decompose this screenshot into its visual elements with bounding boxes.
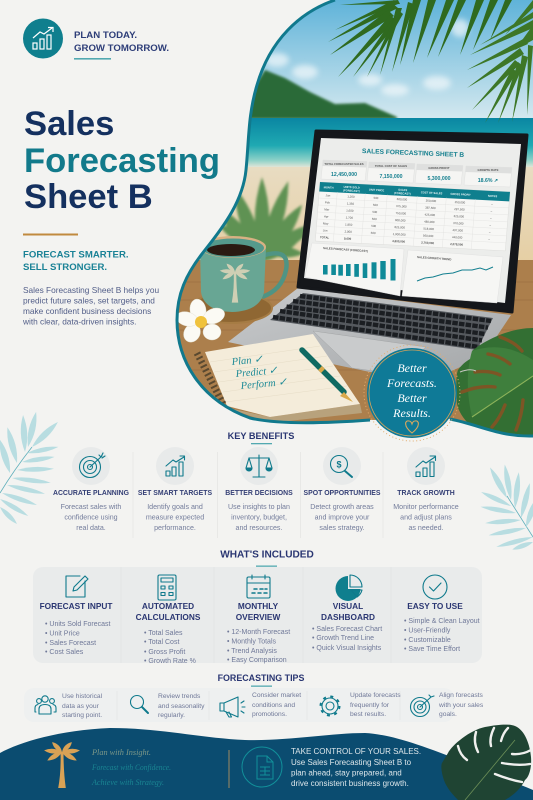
script slogan: Achieve with Strategy. [91, 777, 164, 787]
sales table: – [490, 216, 492, 220]
handwritten list: Predict ✓ [234, 365, 278, 380]
sales table: 675,000 [396, 204, 407, 209]
tip: review trends: and seasonality [158, 703, 205, 710]
icon: gold palm [44, 741, 80, 788]
benefit: track growth: Monitor performance [393, 503, 459, 511]
item: visual dashboard: VISUAL [333, 601, 363, 611]
KPI cards: 5,300,000 [427, 176, 451, 182]
benefit: spot opportunities: SPOT OPPORTUNITIES [304, 490, 381, 497]
sales table: 2,750,000 [421, 240, 435, 245]
tagline: GROW TOMORROW. [74, 43, 169, 54]
tip: update forecasts: best results. [350, 711, 386, 718]
palm on mug [220, 262, 250, 303]
heading: what's included: WHAT'S INCLUDED [220, 550, 314, 560]
heading: key benefits: KEY BENEFITS [228, 431, 294, 441]
item: easy to use: • User-Friendly [404, 628, 451, 634]
call to action: TAKE CONTROL OF YOUR SALES. [291, 747, 421, 756]
laptop screen [298, 131, 527, 312]
item: visual dashboard: • Sales Forecast Chart [312, 626, 382, 633]
item: automated calculations: • Total Sales [144, 630, 183, 637]
sales table: – [491, 202, 493, 206]
sales table: 500 [371, 231, 376, 235]
KPI cards: 12,450,000 [331, 172, 357, 178]
KPI cards: GROWTH RATE [478, 168, 499, 172]
sales table: 370,000 [453, 221, 464, 226]
badge text: Better [397, 361, 427, 375]
section: forecasting tips [24, 673, 484, 722]
sales table: 407,000 [452, 228, 463, 233]
benefit: better decisions [225, 447, 293, 532]
sales table: 518,000 [423, 227, 434, 231]
sales table: 1,350 [347, 201, 355, 206]
sales table: 750,000 [395, 211, 407, 216]
item: visual dashboard: • Quick Visual Insights [312, 645, 382, 652]
sales table: 9,600 [344, 236, 352, 241]
sales table: NOTES [488, 194, 498, 198]
benefit: accurate planning: ACCURATE PLANNING [53, 490, 129, 497]
sales table: 1,850 [345, 222, 353, 227]
sales table: (FORECAST) [343, 188, 360, 193]
item: monthly overview: OVERVIEW [236, 612, 280, 622]
monstera leaf [456, 328, 533, 436]
KPI cards: TOTAL COST OF SALES [375, 164, 407, 168]
benefit: track growth: TRACK GROWTH [397, 490, 455, 497]
benefit: accurate planning: confidence using [64, 514, 118, 522]
tip: historical data: data as your [62, 703, 100, 710]
script slogan: Plan with Insight. [91, 747, 151, 757]
item: visual dashboard: • Growth Trend Line [312, 635, 374, 642]
coaster [200, 298, 273, 322]
benefit: spot opportunities: $ [336, 460, 342, 470]
sales table: UNITS SOLD [343, 185, 360, 190]
benefit: set smart targets: SET SMART TARGETS [138, 490, 212, 497]
sales table: – [488, 237, 491, 241]
item: automated calculations: • Total Cost [144, 639, 179, 646]
item: monthly overview: MONTHLY [238, 601, 279, 611]
item: forecast input [40, 576, 112, 656]
benefit: better decisions: BETTER DECISIONS [225, 490, 293, 497]
subtitle: FORECAST SMARTER. [23, 250, 129, 260]
tip: review trends [130, 693, 205, 719]
item: visual dashboard: DASHBOARD [321, 612, 375, 622]
benefit: set smart targets: Identify goals and [147, 503, 203, 511]
tip: update forecasts: Update forecasts [350, 692, 401, 699]
sales table: 287,500 [454, 207, 465, 212]
trackpad [313, 331, 426, 374]
growth line chart panel [402, 250, 503, 303]
heading: forecasting tips: FORECASTING TIPS [218, 673, 304, 683]
sales table: MONTH [324, 185, 334, 190]
sales table: Apr [324, 214, 329, 219]
handwritten list: Perform ✓ [239, 377, 288, 392]
item: forecast input: • Cost Sales [45, 649, 84, 656]
benefit: track growth: and adjust plans [400, 514, 452, 522]
item: automated calculations: AUTOMATED [142, 601, 194, 611]
heading: what's included [220, 550, 314, 567]
item: easy to use: • Save Time Effort [404, 646, 460, 653]
KPI cards: TOTAL FORECASTED SALES [324, 162, 364, 166]
item: monthly overview [227, 575, 290, 664]
sales table: 250,000 [455, 200, 466, 205]
decorative leaf right [480, 464, 533, 552]
benefit: spot opportunities: and improve your [315, 514, 370, 522]
icon: document [242, 747, 282, 787]
decorative leaf left [0, 411, 60, 526]
badge text: Better [397, 391, 427, 405]
sales table: 480,000 [424, 220, 435, 224]
footer monstera leaf [441, 725, 531, 800]
tip: update forecasts [320, 692, 401, 718]
sales table: 350,000 [426, 199, 437, 203]
sales table: GROSS PROFIT [450, 192, 471, 197]
sky [240, 0, 533, 118]
benefit: better decisions: inventory, budget, [231, 514, 287, 522]
sales table: 800,000 [395, 218, 406, 223]
bar chart panel [305, 243, 404, 296]
sales table: 560,000 [423, 234, 434, 238]
item: easy to use: EASY TO USE [407, 601, 463, 611]
tip: align with goals: with your sales [438, 702, 484, 709]
sales table: 500 [372, 217, 377, 221]
sales table: (FORECAST) [394, 191, 411, 196]
hero scene [170, 0, 533, 436]
sales table: 4,800,000 [392, 239, 406, 244]
badge text: Forecasts. [386, 376, 437, 390]
title: Forecasting [24, 142, 220, 180]
wooden table [170, 260, 533, 430]
intro text: with clear, data-driven insights. [22, 316, 136, 326]
sales table: SALES [398, 188, 408, 192]
sales table: Jun [323, 228, 328, 233]
tip: align with goals [410, 692, 484, 718]
title: Sheet B [24, 178, 153, 216]
tip: market conditions [220, 692, 301, 718]
sales table: Jan [325, 193, 331, 198]
item: easy to use: • Simple & Clean Layout [404, 618, 480, 625]
intro text: Sales Forecasting Sheet B helps you [23, 285, 159, 295]
pen [302, 350, 353, 402]
growth line chart panel: SALES GROWTH TREND [417, 255, 452, 261]
benefit: accurate planning: real data. [76, 524, 106, 532]
call to action: Use Sales Forecasting Sheet B to [291, 758, 412, 767]
benefit: better decisions: and resources. [236, 524, 282, 532]
item: automated calculations: CALCULATIONS [136, 612, 201, 622]
sales table: 825,000 [394, 225, 405, 230]
item: forecast input: • Unit Price [45, 630, 80, 638]
tagline: PLAN TODAY. [74, 30, 137, 41]
sales table: 500 [371, 224, 377, 228]
sales table: 500 [372, 210, 378, 214]
benefit: spot opportunities: Detect growth areas [310, 503, 374, 511]
icon: heart [406, 421, 418, 433]
title: Sales [24, 105, 114, 143]
tip: review trends: Review trends [158, 693, 201, 700]
coffee mug [200, 236, 287, 312]
sand [180, 167, 533, 262]
badge: better forecasts [364, 345, 460, 441]
sales table: Feb [325, 200, 330, 205]
benefit: spot opportunities [304, 447, 381, 532]
screen title: SALES FORECASTING SHEET B [362, 148, 464, 159]
sales table: 1,600 [346, 208, 354, 213]
sales table: 600,000 [397, 197, 408, 202]
plumeria flower [178, 298, 225, 342]
subtitle: SELL STRONGER. [23, 262, 107, 273]
sales table: – [489, 230, 491, 234]
tip: historical data [35, 693, 103, 719]
footer band [0, 725, 533, 800]
notebook [197, 334, 362, 423]
script slogan [91, 747, 171, 787]
laptop base [228, 288, 511, 376]
sales table: 500 [373, 196, 379, 200]
item: forecast input: • Units Sold Forecast [45, 621, 111, 628]
sales table [315, 182, 510, 251]
benefit: set smart targets: measure expected [146, 514, 204, 522]
tip: update forecasts: frequently for [350, 702, 390, 709]
sales table: May [323, 221, 329, 226]
sales table: 2,079,500 [450, 242, 464, 247]
script slogan: Forecast with Confidence. [91, 762, 171, 772]
sales table: 2,000 [344, 229, 352, 234]
benefit: set smart targets [138, 447, 212, 532]
intro text: predict future sales, set targets, and [23, 296, 155, 306]
icon: growth chart logo [23, 18, 63, 58]
handwritten list [232, 356, 286, 390]
item: monthly overview: • Trend Analysis [227, 648, 277, 655]
sales table: 440,000 [452, 235, 463, 240]
item: forecast input: • Sales Forecast [45, 640, 96, 647]
benefit: spot opportunities: sales strategy. [319, 524, 365, 532]
bar chart panel: SALES FORECAST (FORECAST) [323, 246, 368, 253]
hero outline [177, 0, 533, 436]
benefit: accurate planning [53, 447, 129, 532]
KPI cards: 7,150,000 [379, 174, 403, 180]
benefit: track growth [393, 447, 459, 532]
tip: market conditions: Consider market [252, 692, 301, 699]
sales table: 1,000,000 [393, 232, 406, 237]
badge text: Results. [392, 406, 431, 420]
handwritten list: Plan ✓ [230, 354, 264, 368]
tip: align with goals: goals. [439, 711, 457, 718]
tip: review trends: regularly. [158, 712, 185, 719]
item: easy to use [404, 575, 480, 653]
sales table: 425,000 [424, 213, 436, 217]
section: what's included [33, 550, 482, 665]
item: automated calculations: • Gross Profit [144, 649, 185, 656]
benefit: track growth: as needed. [408, 524, 444, 532]
island hill [245, 70, 397, 119]
item: automated calculations: • Growth Rate % [144, 658, 196, 665]
sales table: – [490, 209, 493, 213]
tip: historical data: starting point. [62, 712, 102, 719]
item: easy to use: • Customizable [404, 637, 451, 644]
sales table: 1,200 [347, 194, 355, 199]
sales table: – [489, 223, 492, 227]
call to action: drive consistent business growth. [291, 779, 409, 788]
logo and tagline [23, 18, 169, 60]
tip: market conditions: conditions and [252, 702, 295, 709]
intro text: make confident business decisions [23, 306, 151, 316]
spiral binding [197, 353, 224, 406]
sales table: UNIT PRICE [369, 188, 385, 192]
tip: market conditions: promotions. [252, 711, 287, 718]
benefit: set smart targets: performance. [154, 524, 196, 532]
tip: align with goals: Align forecasts [439, 692, 484, 699]
sales table: 1,700 [346, 215, 353, 220]
item: forecast input: FORECAST INPUT [40, 601, 112, 611]
call to action: plan ahead, stay prepared, and [291, 768, 402, 778]
sales table: Mar [324, 207, 330, 212]
sales table: COST OF SALES [421, 190, 443, 195]
sales table: TOTAL [320, 235, 330, 240]
item: visual dashboard [312, 575, 382, 652]
sales table: 500 [373, 203, 378, 207]
item: monthly overview: • Monthly Totals [227, 638, 277, 646]
section: key benefits [53, 431, 459, 538]
gold rule [23, 234, 78, 236]
sales table: 325,000 [453, 214, 465, 219]
KPI cards [321, 160, 512, 187]
item: monthly overview: • Easy Comparison [227, 657, 287, 664]
beach plant [222, 176, 304, 260]
item: monthly overview: • 12-Month Forecast [227, 629, 290, 636]
KPI cards: 18.6% ↗ [478, 178, 498, 184]
benefit: accurate planning: Forecast sales with [61, 503, 121, 511]
sea [240, 118, 533, 168]
sales table: 387,500 [425, 206, 436, 210]
clouds [265, 19, 469, 96]
benefit: better decisions: Use insights to plan [228, 503, 290, 511]
item: automated calculations [136, 575, 201, 665]
tip: historical data: Use historical [62, 693, 103, 700]
keyboard [270, 293, 493, 350]
badge text [386, 361, 437, 420]
KPI cards: GROSS PROFIT [428, 166, 450, 170]
palm fronds [328, 0, 533, 123]
